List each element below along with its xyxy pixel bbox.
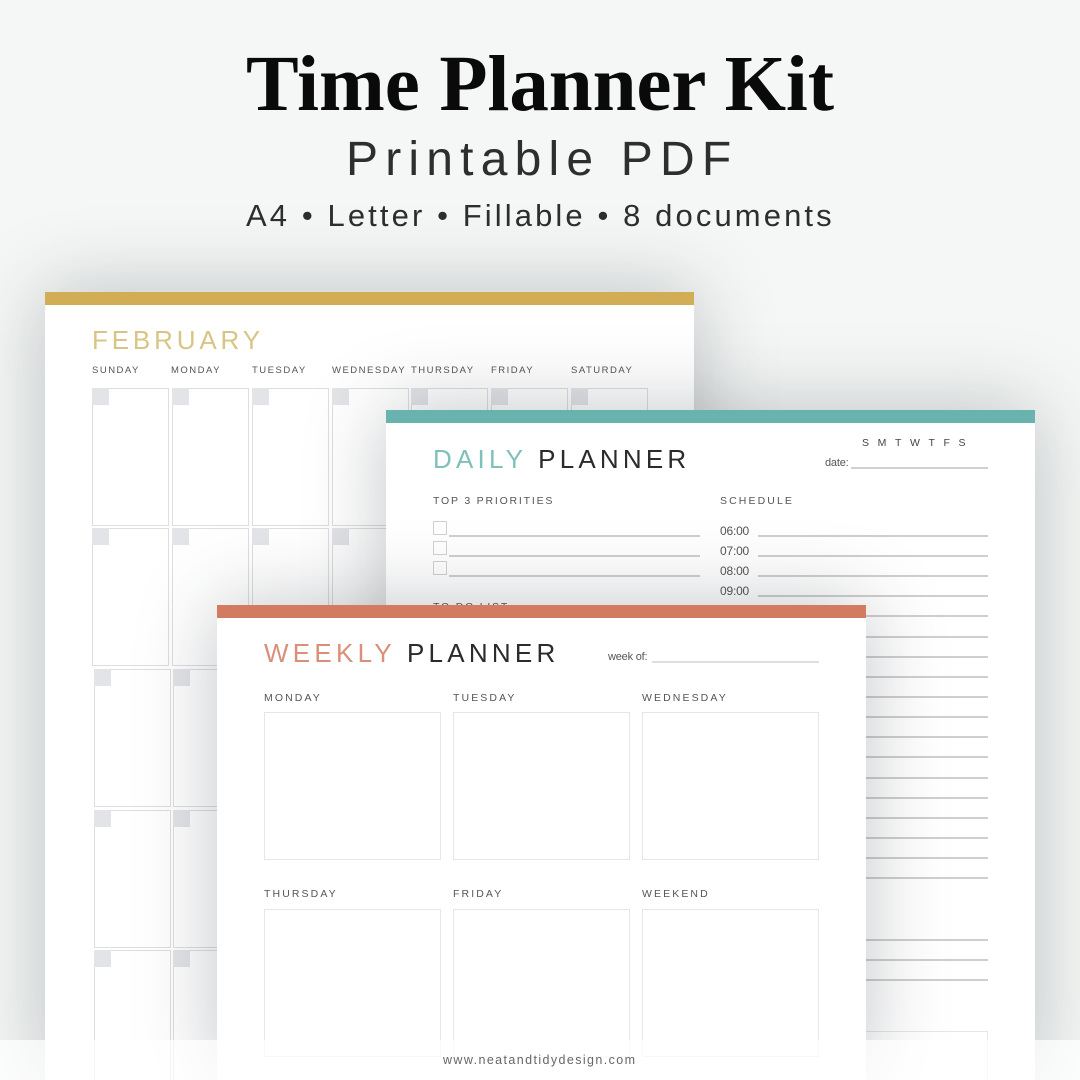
schedule rows: 07:00 (720, 544, 749, 558)
schedule rows: 08:00 (720, 564, 749, 578)
schedule rows: 09:00 (720, 584, 749, 598)
date field: date: (825, 457, 848, 469)
weekday labels: WEDNESDAY (332, 365, 406, 376)
lower note lines (866, 939, 988, 981)
weekend (642, 888, 819, 1040)
monday: MONDAY (264, 692, 322, 704)
weekday letters: SMTWTFS (862, 437, 974, 449)
terracotta header bar (217, 605, 866, 618)
format list: A4 • Letter • Fillable • 8 documents (246, 198, 835, 233)
thursday (264, 888, 441, 1040)
thursday: THURSDAY (264, 888, 338, 900)
panel: weekly planner page (217, 605, 866, 1080)
weekday labels: TUESDAY (252, 365, 307, 376)
teal header bar (386, 410, 1035, 423)
schedule heading: SCHEDULE (720, 495, 794, 507)
tuesday (453, 692, 630, 860)
weekday labels: THURSDAY (411, 365, 475, 376)
weekly planner heading: WEEKLY PLANNER (264, 638, 560, 668)
schedule rows (720, 524, 988, 879)
wednesday (642, 692, 819, 860)
friday (453, 888, 630, 1040)
schedule rows: 06:00 (720, 524, 749, 538)
friday: FRIDAY (453, 888, 503, 900)
week of field: week of: (608, 651, 647, 663)
panel: monthly planner page (45, 292, 694, 1080)
panel: daily planner page (386, 410, 1035, 1080)
priorities heading: TOP 3 PRIORITIES (433, 495, 554, 507)
website address: www.neatandtidydesign.com (443, 1053, 636, 1067)
wednesday: WEDNESDAY (642, 692, 728, 704)
notes box (758, 1031, 988, 1080)
daily planner heading: DAILY PLANNER (433, 444, 690, 474)
calendar grid (92, 388, 648, 1080)
subtitle: Printable PDF (346, 133, 738, 186)
weekday labels: MONDAY (171, 365, 221, 376)
monday (264, 692, 441, 860)
month heading: FEBRUARY (92, 325, 264, 355)
gold header bar (45, 292, 694, 305)
weekend: WEEKEND (642, 888, 710, 900)
weekday labels: SATURDAY (571, 365, 633, 376)
weekday labels (92, 365, 633, 376)
tuesday: TUESDAY (453, 692, 517, 704)
to-do list heading: TO DO LIST (433, 601, 509, 613)
weekday labels: SUNDAY (92, 365, 140, 376)
footer band (0, 1040, 1080, 1080)
priorities checklist (433, 521, 700, 577)
weekday labels: FRIDAY (491, 365, 534, 376)
title: Time Planner Kit (246, 41, 834, 128)
